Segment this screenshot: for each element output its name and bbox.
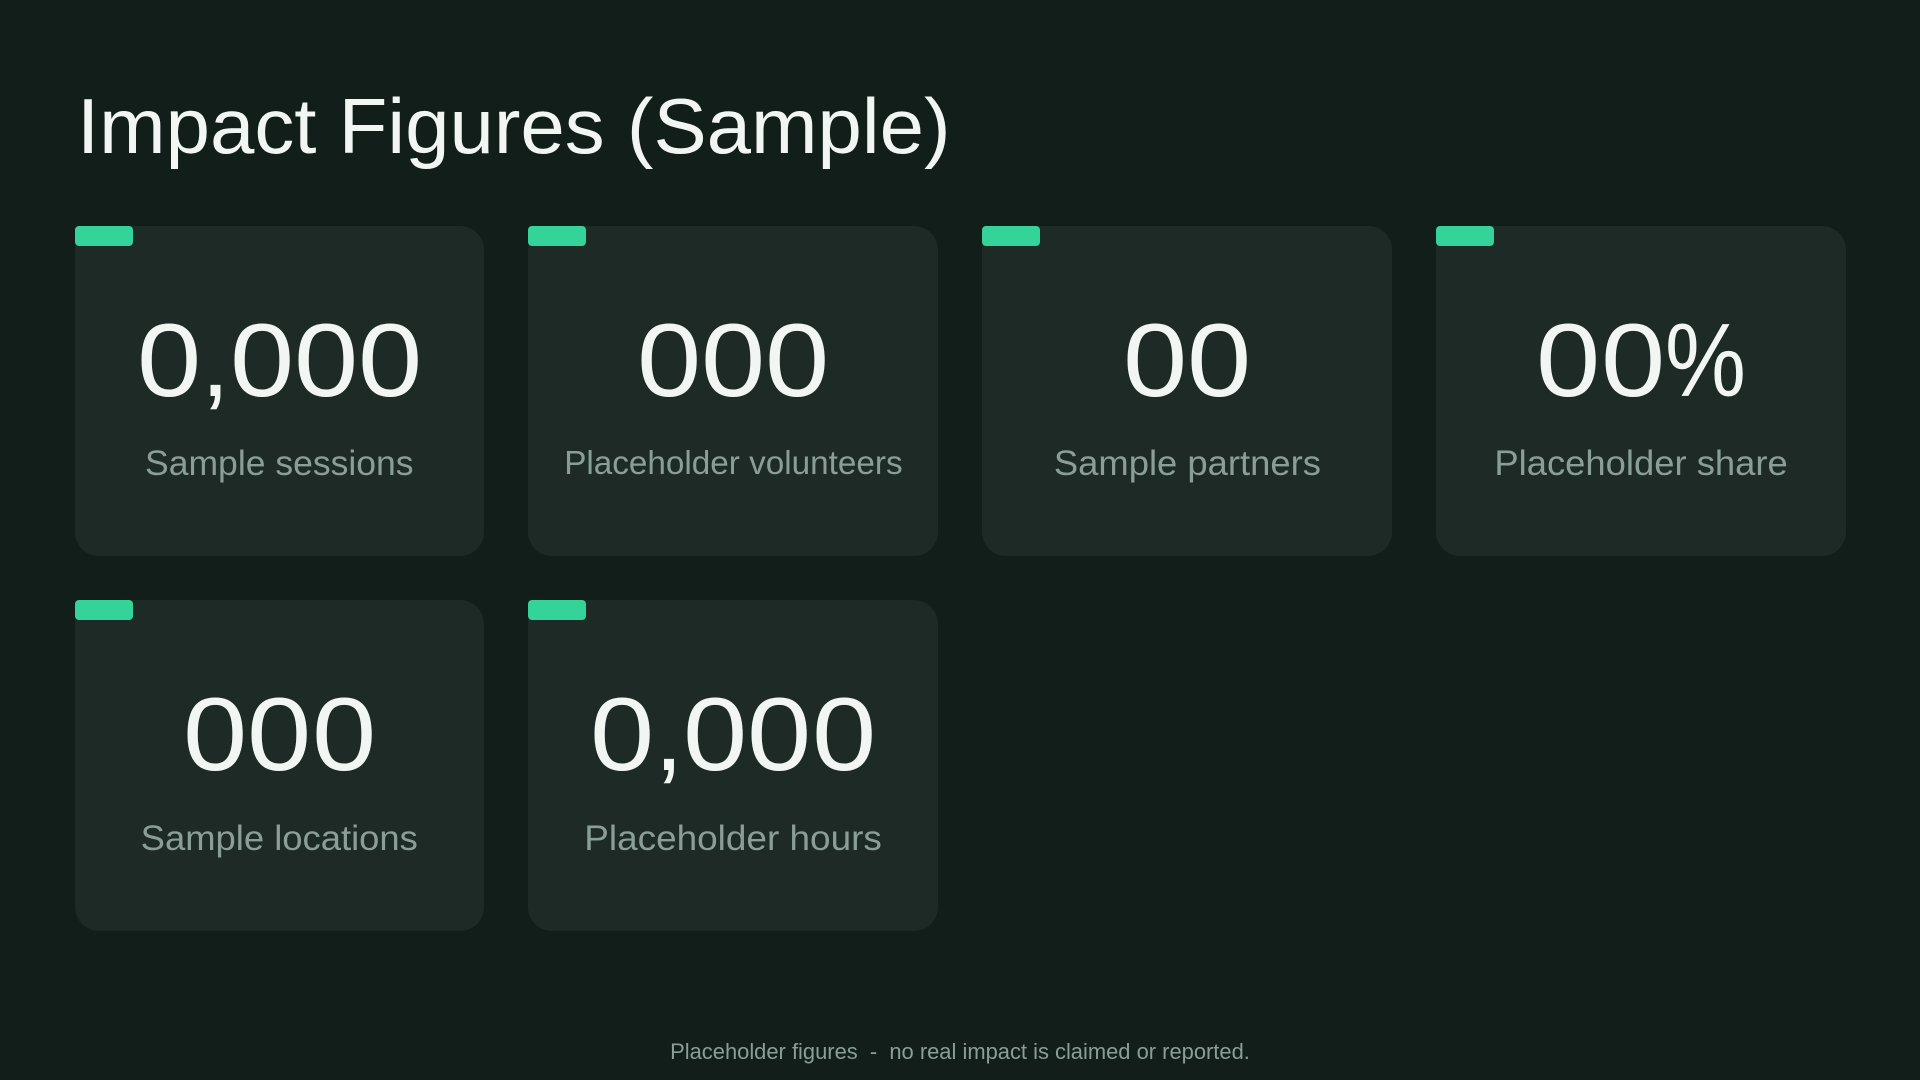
label: Sample sessions: [145, 444, 414, 483]
figure: [637, 303, 829, 419]
panel: sample partners: [982, 226, 1392, 556]
figure: 0: [294, 303, 358, 419]
figure: [1123, 303, 1251, 419]
panel: sample locations: [75, 600, 484, 931]
figure: 0: [358, 303, 422, 419]
figure: ,: [201, 303, 230, 419]
label: Sample locations: [141, 819, 418, 858]
figure: [590, 677, 876, 793]
figure: 0: [183, 677, 247, 793]
footnote: Placeholder figures - no real impact is claimed or reported.: [670, 1039, 1250, 1064]
figure: 0: [590, 677, 654, 793]
figure: [1536, 303, 1746, 419]
figure: 0: [312, 677, 376, 793]
figure: ,: [654, 677, 683, 793]
accent tab: [528, 600, 586, 620]
panel: placeholder hours: [528, 600, 938, 931]
label: Placeholder share: [1494, 444, 1788, 483]
figure: 0: [747, 677, 812, 793]
figure: 0: [1600, 303, 1665, 419]
accent tab: [982, 226, 1040, 246]
accent tab: [75, 600, 133, 620]
figure: 0: [637, 303, 701, 419]
figure: 0: [1536, 303, 1601, 419]
figure: 0: [230, 303, 294, 419]
figure: 0: [765, 303, 829, 419]
figure: %: [1665, 303, 1746, 419]
title: Impact Figures (Sample): [77, 82, 951, 170]
figure: 0: [137, 303, 201, 419]
accent tab: [75, 226, 133, 246]
label: Placeholder volunteers: [564, 445, 902, 482]
accent tab: [528, 226, 586, 246]
panel: placeholder share: [1436, 226, 1846, 556]
figure: 0: [247, 677, 312, 793]
accent tab: [1436, 226, 1494, 246]
figure: 0: [1187, 303, 1251, 419]
label: Placeholder hours: [584, 819, 882, 858]
figure: 0: [683, 677, 747, 793]
figure: 0: [701, 303, 765, 419]
figure: 0: [812, 677, 876, 793]
figure: [183, 677, 376, 793]
panel: placeholder volunteers: [528, 226, 938, 556]
figure: 0: [1123, 303, 1187, 419]
figure: [137, 303, 422, 419]
label: Sample partners: [1053, 444, 1321, 483]
panel: sample sessions: [75, 226, 484, 556]
